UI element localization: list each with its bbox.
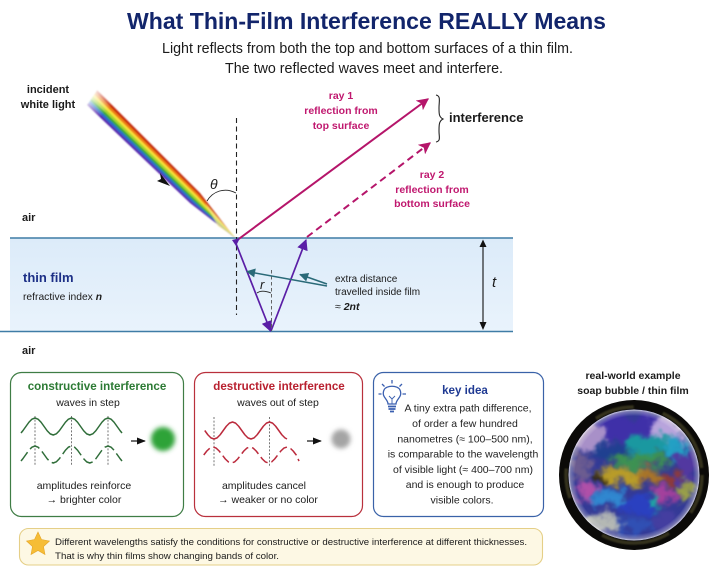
label: ray 2: reflection from (395, 184, 469, 196)
label: thin film (23, 270, 102, 303)
panel: thin film layer (0, 238, 513, 332)
label: real-world example: real-world example (585, 370, 681, 382)
wave guides (214, 417, 270, 467)
body text: nanometres (≈ 100–500 nm), (397, 434, 533, 446)
label: thin film: thin film (23, 270, 74, 285)
label: interference: interference (449, 110, 523, 125)
panel: note (20, 528, 542, 565)
refracted rays inside film (232, 238, 306, 331)
brace (436, 95, 443, 142)
heading: key idea (442, 384, 488, 397)
label: ray 1: ray 1 (329, 90, 353, 102)
callout arrows (247, 272, 327, 286)
title: What Thin-Film Interference REALLY Means (127, 8, 606, 34)
panel: constructive interference (10, 372, 184, 516)
top wave (21, 418, 122, 435)
label: extra distance: travelled inside film (335, 287, 420, 298)
result text: → weaker or no color (218, 494, 318, 506)
label: incident white light: white light (20, 99, 76, 111)
dashed wave (204, 447, 299, 463)
thickness arrow (480, 240, 486, 330)
body text (388, 402, 538, 506)
note text (55, 537, 527, 562)
panel: key idea (374, 372, 544, 516)
normal at lower surface (270, 270, 272, 331)
body text: A tiny extra path difference, (404, 402, 532, 414)
label: extra distance: extra distance (335, 274, 398, 285)
label: real-world example (577, 370, 689, 397)
label: real-world example: soap bubble / thin film (577, 385, 689, 397)
label: ray 1: top surface (313, 120, 369, 132)
icon: rainbow incident beam (87, 90, 236, 238)
icon: gray glow (332, 430, 350, 448)
note text: Different wavelengths satisfy the conditions for constructive or destructive interference at different thicknesses. (55, 537, 527, 548)
subtitle (162, 41, 573, 77)
result text (218, 480, 318, 506)
arrow (131, 440, 145, 442)
heading: constructive interference (28, 380, 167, 393)
angle theta (207, 176, 236, 201)
panel: destructive interference (194, 372, 362, 516)
arrow (307, 440, 321, 442)
angle r: r (260, 277, 265, 292)
subheading: waves out of step (236, 397, 319, 409)
icon: star (26, 532, 50, 554)
icon: light bulb (378, 380, 406, 412)
icon: beam direction arrow (157, 173, 170, 186)
subtitle: The two reflected waves meet and interfere. (225, 61, 503, 77)
result text: amplitudes cancel (222, 480, 306, 492)
label: extra distance: ≈ 2nt (335, 301, 360, 313)
label: ray 2 (394, 169, 470, 210)
label: air below: air (22, 345, 36, 357)
icon: green glow (151, 427, 175, 451)
heading: destructive interference (213, 380, 345, 393)
result text (37, 480, 131, 506)
dashed wave (21, 446, 122, 463)
label: t: t (492, 274, 497, 291)
body text: of order a few hundred (412, 418, 518, 430)
label: ray 1: reflection from (304, 105, 378, 117)
wave guides (35, 416, 108, 466)
label: thin film: refractive index n (23, 292, 102, 303)
ray 2 reflected (307, 143, 430, 237)
normal line (236, 118, 238, 315)
label: air above: air (22, 212, 36, 224)
top wave (205, 422, 287, 439)
ray 1 reflected (236, 99, 428, 241)
label: incident white light: incident (27, 84, 69, 96)
label: ray 1 (304, 90, 378, 132)
note text: That is why thin films show changing bands of color. (55, 551, 279, 562)
label: ray 2: bottom surface (394, 198, 470, 210)
icon: soap bubble photo (559, 400, 709, 550)
result text: → brighter color (47, 494, 122, 506)
angle theta: θ (210, 176, 218, 192)
body text: and is enough to produce (406, 479, 524, 491)
label: ray 2: ray 2 (420, 169, 444, 181)
angle r (257, 277, 271, 293)
subtitle: Light reflects from both the top and bottom surfaces of a thin film. (162, 41, 573, 57)
label: extra distance (335, 274, 420, 313)
result text: amplitudes reinforce (37, 480, 131, 492)
body text: is comparable to the wavelength (388, 448, 538, 460)
body text: of visible light (≈ 400–700 nm) (393, 464, 533, 476)
subheading: waves in step (55, 397, 120, 409)
label: incident white light (20, 84, 76, 111)
body text: visible colors. (430, 494, 494, 506)
